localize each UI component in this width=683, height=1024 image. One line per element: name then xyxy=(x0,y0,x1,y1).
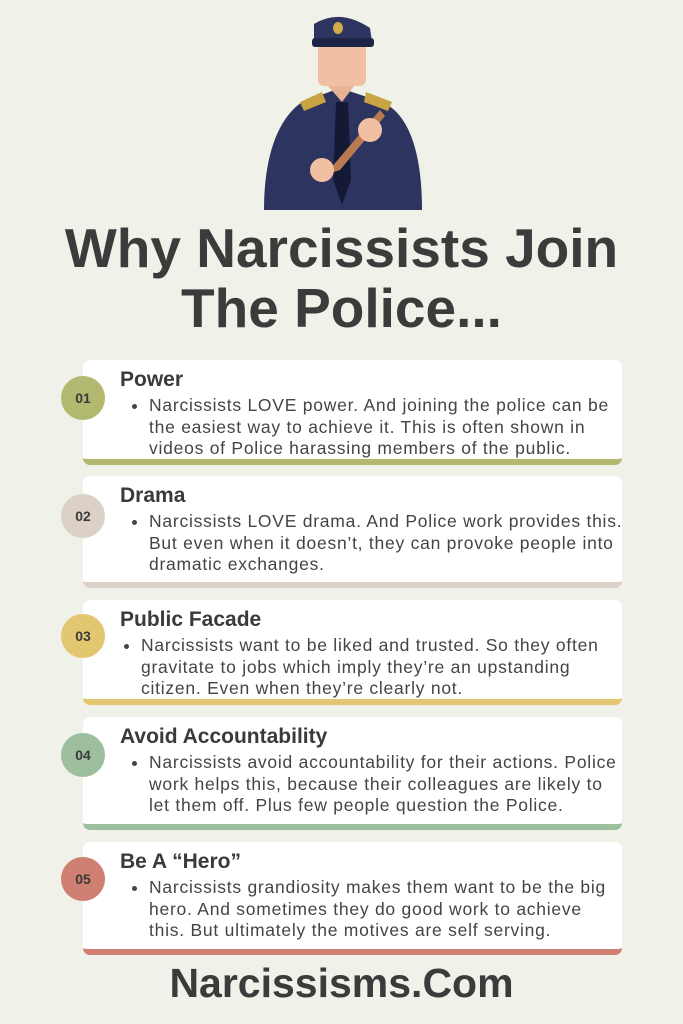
text: hero xyxy=(132,877,606,940)
panel: hero xyxy=(83,842,622,955)
text: drama xyxy=(132,511,622,574)
text: avoid accountability: Narcissists avoid accountability for their actions. Police xyxy=(149,752,617,772)
icon: number 04 xyxy=(61,733,105,777)
icon: number 02: 02 xyxy=(75,508,91,524)
title xyxy=(65,217,618,339)
panel: public facade xyxy=(83,600,622,705)
icon: number 05 xyxy=(61,857,105,901)
text: drama: Narcissists LOVE drama. And Police work provides this. xyxy=(149,511,622,531)
text: hero: hero. And sometimes they do good work to achieve xyxy=(149,898,582,918)
icon: number 03 xyxy=(61,614,105,658)
text: drama: But even when it doesn’t, they can provoke people into xyxy=(149,532,614,552)
icon: number 05: 05 xyxy=(75,871,91,887)
text: public facade: gravitate to jobs which imply they’re an upstanding xyxy=(141,656,570,676)
panel: drama xyxy=(83,476,622,588)
heading: avoid accountability: Avoid Accountability xyxy=(120,725,327,748)
text: hero: Narcissists grandiosity makes them want to be the big xyxy=(149,877,606,897)
icon: number 01: 01 xyxy=(75,390,91,406)
text: power: videos of Police harassing members of the public. xyxy=(149,438,571,458)
text: avoid accountability xyxy=(132,752,617,815)
heading: public facade: Public Facade xyxy=(120,608,261,631)
icon: number 02 xyxy=(61,494,105,538)
text: public facade xyxy=(124,635,599,698)
icon: police officer xyxy=(264,16,422,210)
text: public facade: Narcissists want to be liked and trusted. So they often xyxy=(141,635,599,655)
text: drama: dramatic exchanges. xyxy=(149,554,325,574)
text: power: the easiest way to achieve it. This is often shown in xyxy=(149,416,585,436)
text: avoid accountability: work helps this, because their colleagues are likely to xyxy=(149,774,603,794)
text: power: Narcissists LOVE power. And joining the police can be xyxy=(149,395,609,415)
icon: number 01 xyxy=(61,376,105,420)
text: hero: this. But ultimately the motives are self serving. xyxy=(149,920,551,940)
icon: number 04: 04 xyxy=(75,747,91,763)
panel: avoid accountability xyxy=(83,717,622,830)
text: avoid accountability: let them off. Plus few people question the Police. xyxy=(149,795,564,815)
icon: number 03: 03 xyxy=(75,628,91,644)
heading: drama: Drama xyxy=(120,484,185,507)
panel: power xyxy=(83,360,622,465)
text: public facade: citizen. Even when they’re clearly not. xyxy=(141,678,463,698)
footer: Narcissisms.Com xyxy=(169,960,514,1006)
heading: hero: Be A “Hero” xyxy=(120,850,241,873)
text: power xyxy=(132,395,609,458)
title: Why Narcissists Join xyxy=(65,217,618,279)
heading: power: Power xyxy=(120,368,183,391)
title: The Police... xyxy=(181,277,502,339)
